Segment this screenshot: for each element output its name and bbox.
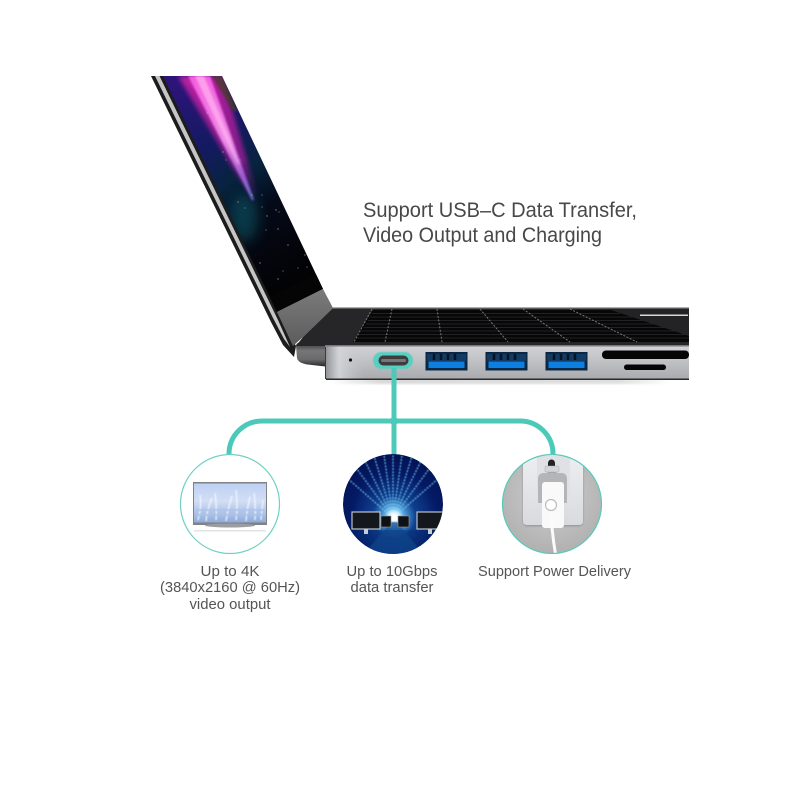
- icon: television: [180, 454, 280, 554]
- keyboard rows: [356, 314, 689, 338]
- charging cable: [550, 528, 557, 553]
- feature: power delivery: [478, 450, 632, 580]
- hub body: [325, 345, 689, 380]
- USB-A port 3: [546, 352, 588, 370]
- title: Support USB–C Data Transfer,: [363, 199, 637, 222]
- caption: data transfer: [346, 564, 438, 596]
- caption: data transfer: data transfer: [350, 580, 434, 596]
- caption: power delivery: Support Power Delivery: [478, 564, 632, 580]
- monitors: [352, 512, 443, 534]
- charger prong: [545, 466, 559, 472]
- road: [368, 521, 418, 554]
- caption: video output: (3840x2160 @ 60Hz): [160, 580, 300, 596]
- key columns: [354, 309, 637, 342]
- caption: video output: video output: [190, 597, 270, 613]
- caption: video output: Up to 4K: [200, 564, 260, 580]
- indicator light: [349, 358, 352, 362]
- trackpad corner: [608, 309, 689, 336]
- lid bottom bezel: [277, 289, 333, 346]
- data rays: [349, 454, 437, 514]
- USB-A port 1: [426, 352, 468, 370]
- microSD card slot: [624, 364, 666, 370]
- frosted grass on TV: [195, 490, 264, 521]
- icon: wall charger: [502, 450, 602, 554]
- caption: video output: [160, 564, 300, 613]
- laptop lid: [150, 70, 340, 357]
- title: [363, 199, 637, 247]
- feature: 4K video output: [160, 454, 300, 613]
- USB-A port 2: [486, 352, 528, 370]
- outlet: [548, 460, 555, 466]
- charger body: [538, 473, 567, 503]
- USB-C port: [373, 352, 413, 369]
- keyboard deck: [296, 308, 689, 346]
- laptop rear base: [296, 342, 330, 367]
- connector lines: [229, 368, 553, 456]
- laptop screen: [163, 76, 323, 312]
- laptop with hub: [150, 70, 689, 384]
- caption: data transfer: Up to 10Gbps: [346, 564, 438, 580]
- wall plate: [522, 465, 584, 527]
- SD card slot: [602, 350, 689, 359]
- title: Video Output and Charging: [363, 224, 602, 247]
- icon: data network: [343, 454, 443, 554]
- screen stars: [206, 112, 308, 280]
- soft shadow under hub: [330, 379, 670, 384]
- feature: data transfer: [343, 454, 443, 592]
